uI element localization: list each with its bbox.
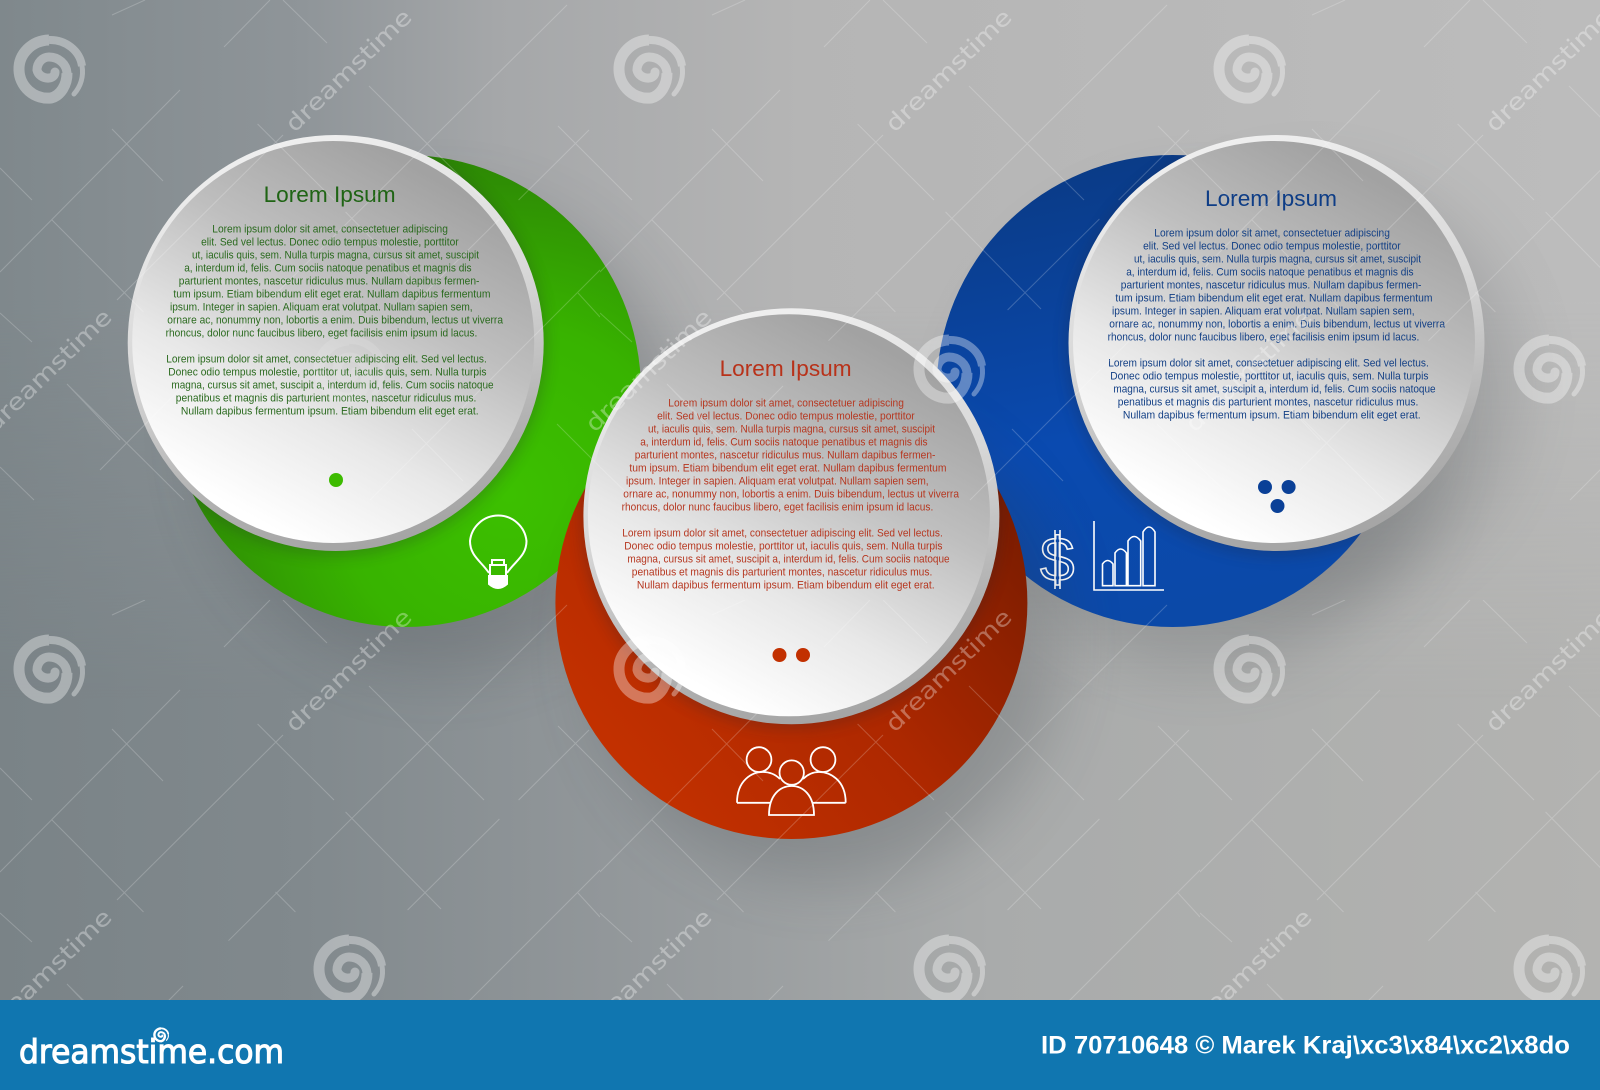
text block: a, interdum id, felis. Cum sociis natoque penatibus et magnis dis: [1126, 266, 1414, 278]
text block: a, interdum id, felis. Cum sociis natoque penatibus et magnis dis: [184, 262, 472, 274]
text block: [1108, 228, 1445, 422]
red crescent: [555, 367, 1027, 839]
watermark words: dreamstime: [1481, 604, 1600, 738]
text block: rhoncus, dolor nunc faucibus libero, eget facilisis enim ipsum id lacus.: [1108, 332, 1419, 344]
text block: ipsum. Integer in sapien. Aliquam erat volutpat. Nullam sapien sem,: [1112, 306, 1415, 318]
text block: magna, cursus sit amet, suscipit a, interdum id, felis. Cum sociis natoque: [1113, 384, 1436, 396]
text block: Lorem ipsum dolor sit amet, consectetuer adipiscing elit. Sed vel lectus.: [166, 354, 487, 366]
watermark words: dreamstime: [1181, 304, 1318, 438]
heading: Lorem Ipsum: [264, 182, 396, 207]
text block: ipsum. Integer in sapien. Aliquam erat volutpat. Nullam sapien sem,: [626, 476, 929, 488]
panel: blue circle: [936, 135, 1520, 666]
text block: elit. Sed vel lectus. Donec odio tempus molestie, porttitor: [1143, 240, 1401, 252]
text block: ut, iaculis quis, sem. Nulla turpis magna, cursus sit amet, suscipit: [192, 250, 479, 262]
panel: red circle: [555, 308, 1062, 881]
white disc: [1068, 135, 1484, 551]
text block: Lorem ipsum dolor sit amet, consectetuer adipiscing elit. Sed vel lectus.: [1108, 358, 1429, 370]
white disc: [583, 308, 999, 724]
text block: ut, iaculis quis, sem. Nulla turpis magna, cursus sit amet, suscipit: [1134, 254, 1421, 266]
text block: tum ipsum. Etiam bibendum elit eget erat. Nullam dapibus fermentum: [1115, 292, 1432, 304]
text block: ut, iaculis quis, sem. Nulla turpis magna, cursus sit amet, suscipit: [648, 424, 935, 436]
text block: Lorem ipsum dolor sit amet, consectetuer adipiscing: [212, 224, 448, 236]
icon: dollar sign: $: [1040, 526, 1074, 595]
text block: penatibus et magnis dis parturient montes, nascetur ridiculus mus.: [1118, 396, 1418, 408]
text block: magna, cursus sit amet, suscipit a, interdum id, felis. Cum sociis natoque: [627, 554, 950, 566]
text block: Donec odio tempus molestie, porttitor ut, iaculis quis, sem. Nulla turpis: [168, 366, 487, 378]
step dots: [1258, 480, 1296, 513]
green crescent: [169, 155, 641, 627]
text block: ornare ac, nonummy non, lobortis a enim. Duis bibendum, lectus ut viverra: [1109, 318, 1445, 330]
watermark words: dreamstime: [881, 4, 1018, 138]
text block: penatibus et magnis dis parturient montes, nascetur ridiculus mus.: [632, 566, 932, 578]
step dots: [772, 648, 810, 662]
panel: green circle: [125, 135, 676, 671]
text block: [622, 398, 959, 592]
text block: parturient montes, nascetur ridiculus mus. Nullam dapibus fermen-: [1121, 280, 1422, 292]
logo spiral: [154, 1028, 168, 1041]
text block: a, interdum id, felis. Cum sociis natoque penatibus et magnis dis: [640, 436, 928, 448]
text block: Lorem ipsum dolor sit amet, consectetuer adipiscing elit. Sed vel lectus.: [622, 528, 943, 540]
text block: ornare ac, nonummy non, lobortis a enim. Duis bibendum, lectus ut viverra: [167, 314, 503, 326]
text block: Nullam dapibus fermentum ipsum. Etiam bibendum elit eget erat.: [637, 580, 935, 592]
text block: tum ipsum. Etiam bibendum elit eget erat. Nullam dapibus fermentum: [629, 462, 946, 474]
text block: Donec odio tempus molestie, porttitor ut, iaculis quis, sem. Nulla turpis: [1110, 370, 1429, 382]
icon: people: [737, 747, 846, 815]
text block: rhoncus, dolor nunc faucibus libero, eget facilisis enim ipsum id lacus.: [166, 328, 477, 340]
logo text: dreamstime.com: [19, 1032, 284, 1071]
footer banner: [0, 1000, 1600, 1090]
text block: Lorem ipsum dolor sit amet, consectetuer adipiscing: [1154, 228, 1390, 240]
watermark words: dreamstime: [581, 904, 718, 1038]
text block: rhoncus, dolor nunc faucibus libero, eget facilisis enim ipsum id lacus.: [622, 502, 933, 514]
text block: elit. Sed vel lectus. Donec odio tempus molestie, porttitor: [657, 410, 915, 422]
text block: Nullam dapibus fermentum ipsum. Etiam bibendum elit eget erat.: [181, 406, 479, 418]
icon: light bulb: [470, 516, 526, 588]
text block: penatibus et magnis dis parturient montes, nascetur ridiculus mus.: [176, 392, 476, 404]
watermark words: dreamstime: [581, 304, 718, 438]
text block: tum ipsum. Etiam bibendum elit eget erat. Nullam dapibus fermentum: [173, 288, 490, 300]
text block: ornare ac, nonummy non, lobortis a enim. Duis bibendum, lectus ut viverra: [623, 488, 959, 500]
step dot: [329, 473, 343, 487]
watermark words: dreamstime: [1481, 4, 1600, 138]
watermark words: dreamstime: [281, 604, 418, 738]
watermark words: dreamstime: [281, 4, 418, 138]
watermark words: dreamstime: [1181, 904, 1318, 1038]
text block: Nullam dapibus fermentum ipsum. Etiam bibendum elit eget erat.: [1123, 410, 1421, 422]
icon: bar chart: [1094, 521, 1164, 590]
text block: elit. Sed vel lectus. Donec odio tempus molestie, porttitor: [201, 236, 459, 248]
white disc: [128, 135, 544, 551]
watermark words: dreamstime: [881, 604, 1018, 738]
text block: magna, cursus sit amet, suscipit a, interdum id, felis. Cum sociis natoque: [171, 380, 494, 392]
text block: [166, 224, 503, 418]
heading: Lorem Ipsum: [1205, 186, 1337, 211]
credit: ID 70710648 © Marek Kraj\xc3\x84\xc2\x8do: [1041, 1032, 1570, 1060]
blue crescent: [936, 155, 1408, 627]
text block: parturient montes, nascetur ridiculus mus. Nullam dapibus fermen-: [179, 276, 480, 288]
text block: parturient montes, nascetur ridiculus mus. Nullam dapibus fermen-: [635, 450, 936, 462]
text block: Lorem ipsum dolor sit amet, consectetuer adipiscing: [668, 398, 904, 410]
text block: ipsum. Integer in sapien. Aliquam erat volutpat. Nullam sapien sem,: [170, 302, 473, 314]
text block: Donec odio tempus molestie, porttitor ut, iaculis quis, sem. Nulla turpis: [624, 540, 943, 552]
heading: Lorem Ipsum: [720, 356, 852, 381]
